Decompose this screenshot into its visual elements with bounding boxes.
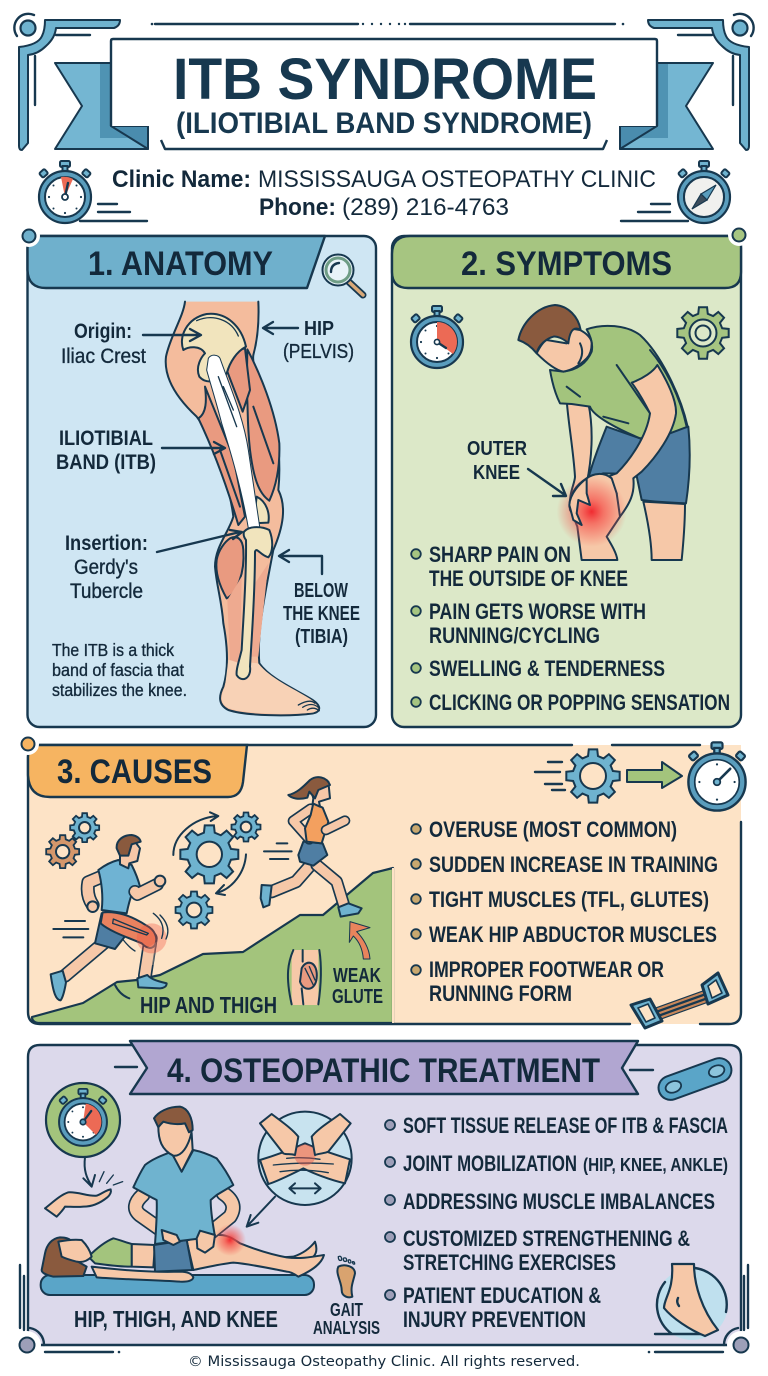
foot highlight: [222, 660, 318, 714]
rear arm: [293, 809, 311, 839]
itb label: BAND (ITB): [56, 451, 156, 474]
panel: symptoms: [392, 224, 750, 727]
therapist: upper body: [133, 1107, 233, 1253]
itb label: [56, 427, 156, 474]
therapist: neck: [170, 1133, 193, 1172]
symptom 1: THE OUTSIDE OF KNEE: [429, 566, 628, 591]
gait analysis label: [313, 1300, 380, 1338]
treatment 2: (HIP, KNEE, ANKLE): [583, 1155, 728, 1175]
leg contact line: [115, 985, 129, 998]
heading: 4. OSTEOPATHIC TREATMENT: [167, 1052, 600, 1090]
gear: large blue: [180, 825, 238, 883]
panel background: [28, 745, 741, 1024]
pelvis bone: [182, 314, 246, 381]
icon: magnifier: [322, 254, 363, 295]
back leg: [272, 865, 311, 892]
hill: [32, 868, 393, 1023]
corner ornament: top right: [648, 14, 754, 150]
pain glow: [557, 477, 627, 547]
hip label: [283, 318, 354, 363]
patient: near leg: [187, 1235, 324, 1277]
below the knee label: (TIBIA): [295, 626, 348, 648]
patient: head: [58, 1240, 92, 1262]
icon: foot and ankle: [655, 1264, 728, 1340]
symptom list: [411, 542, 730, 715]
near arm: [602, 365, 676, 517]
patient: shorts: [154, 1240, 192, 1272]
symptom 1: [411, 542, 628, 591]
outer knee label: [467, 438, 527, 484]
patient: torso skin: [132, 1244, 155, 1267]
gait analysis label: ANALYSIS: [313, 1318, 380, 1338]
hair and ponytail: [288, 777, 330, 799]
panel: causes: [17, 733, 746, 1028]
insertion label: [65, 532, 148, 603]
icon: gear with speed lines: [535, 749, 620, 803]
shorts: [588, 427, 690, 503]
speed lines left: [80, 204, 147, 221]
panel: anatomy: [18, 225, 376, 727]
therapist arm: right: [207, 1193, 233, 1235]
hand on knee: [569, 478, 590, 525]
patient: top: [88, 1238, 132, 1267]
heading ribbon: [130, 1041, 638, 1094]
title: ITB SYNDROME: [173, 47, 597, 112]
panel header: [28, 745, 247, 797]
treatment 5: INJURY PREVENTION: [403, 1307, 586, 1332]
muscle: calf: [216, 537, 244, 598]
torso: [98, 860, 140, 913]
muscle: hamstring: [198, 387, 245, 525]
icon: green arrow: [627, 762, 682, 788]
corner ornament: bottom right: [648, 1265, 755, 1359]
phone: Phone:: [259, 194, 336, 221]
shorts: [95, 913, 127, 949]
therapist hand: left: [162, 1230, 180, 1245]
panel background: [392, 236, 741, 727]
icon: stretch band: [655, 1055, 735, 1103]
copyright: © Mississauga Osteopathy Clinic. All rights reserved.: [188, 1354, 580, 1370]
cause 5: IMPROPER FOOTWEAR OR: [429, 957, 664, 982]
title box: [111, 39, 657, 149]
corner ornament: bottom left: [13, 1265, 120, 1359]
far leg: [643, 502, 685, 560]
glute illustration: [288, 950, 321, 1005]
treatment 4: CUSTOMIZED STRENGTHENING &: [403, 1226, 690, 1251]
below the knee label: [283, 580, 360, 648]
symptom 3: SWELLING & TENDERNESS: [429, 656, 665, 681]
origin label: [61, 320, 146, 368]
muscle: tensor fasciae latae: [227, 348, 250, 412]
panel frame: [28, 745, 741, 1024]
iliotibial band: [207, 355, 261, 534]
head: [537, 328, 592, 372]
hip label: (PELVIS): [283, 341, 354, 363]
cause 3: TIGHT MUSCLES (TFL, GLUTES): [429, 887, 709, 912]
front leg: [317, 865, 344, 906]
header: [14, 14, 754, 150]
hip label: HIP: [304, 318, 334, 340]
gait analysis label: GAIT: [330, 1300, 363, 1320]
icon: gear: [677, 307, 729, 359]
therapist hand: right: [197, 1231, 215, 1253]
arrow: itb: [162, 442, 225, 454]
weak glute label: GLUTE: [332, 986, 383, 1008]
knee pain glow: [214, 1224, 246, 1256]
hip and thigh label: HIP AND THIGH: [140, 992, 277, 1018]
symptom 1: SHARP PAIN ON: [429, 542, 571, 567]
hill ground edge: [392, 868, 394, 1023]
corner ornament: top left: [14, 14, 120, 150]
cause 5: [411, 957, 664, 1006]
arrow: below the knee: [279, 550, 322, 574]
corner dot: [728, 224, 750, 246]
toes: [298, 701, 319, 711]
hair: [518, 305, 581, 353]
symptom 2: PAIN GETS WORSE WITH: [429, 599, 646, 624]
origin label: Iliac Crest: [61, 345, 146, 368]
arrow: hip: [263, 322, 298, 334]
icon: compass watch: [678, 161, 730, 223]
clinic name: MISSISSAUGA OSTEOPATHY CLINIC: [258, 166, 656, 193]
leg anatomy illustration: [166, 302, 319, 715]
head: [309, 782, 330, 807]
cause 5: RUNNING FORM: [429, 981, 572, 1006]
treatment 5: PATIENT EDUCATION &: [403, 1283, 601, 1308]
arrow: inset to knee: [247, 1197, 275, 1227]
panel header: [28, 236, 325, 288]
speed lines: [264, 843, 292, 859]
front arm: [135, 884, 157, 894]
treatment list: [385, 1113, 728, 1332]
symptom 2: RUNNING/CYCLING: [429, 623, 600, 648]
top divider: [151, 23, 624, 25]
description: The ITB is a thick: [52, 640, 174, 660]
clinic name: Clinic Name:: [112, 166, 251, 193]
phone: (289) 216-4763: [342, 194, 509, 221]
tibia and fibula: [237, 527, 272, 679]
magnified tissue inset: [258, 1112, 352, 1205]
therapist: shirt: [133, 1150, 233, 1244]
symptom 2: [411, 599, 646, 648]
tank top: [305, 803, 328, 843]
ribbon: left: [55, 63, 148, 149]
runner: man: [51, 835, 168, 1000]
outer knee label: KNEE: [473, 462, 520, 484]
footprint: [337, 1256, 355, 1297]
treatment 4: STRETCHING EXERCISES: [403, 1250, 616, 1275]
strain marks: [123, 913, 168, 951]
knee: [569, 474, 620, 560]
head: [120, 842, 140, 868]
femur end and patella: [253, 497, 269, 523]
muscle: quadriceps: [247, 349, 279, 501]
hair: [117, 835, 141, 856]
insertion label: Tubercle: [70, 580, 143, 603]
panel background: [28, 236, 376, 727]
patient: far leg: [227, 1242, 316, 1263]
patient: arm: [92, 1267, 193, 1282]
outer knee label: OUTER: [467, 438, 527, 460]
front lower leg: [145, 938, 151, 976]
treatment 2: [385, 1151, 728, 1176]
speed lines: [53, 921, 88, 937]
subtitle: (ILIOTIBIAL BAND SYNDROME): [176, 107, 592, 140]
thigh with inflamed itb: [101, 912, 156, 948]
treatment mat: [41, 1275, 314, 1295]
therapist: head: [158, 1120, 192, 1156]
therapist: hair: [154, 1107, 193, 1132]
arrow: insertion: [157, 530, 242, 552]
back leg: [65, 943, 103, 976]
open hand: [45, 1189, 111, 1217]
icon: resistance band: [631, 973, 728, 1028]
clinic details: [39, 161, 730, 223]
insertion label: Insertion:: [65, 532, 148, 555]
arrow: stopwatch to hand: [83, 1157, 95, 1187]
heading: 2. SYMPTOMS: [461, 245, 672, 283]
t-shirt: [550, 326, 688, 438]
gear: small blue right: [232, 813, 260, 841]
hip thigh knee label: HIP, THIGH, AND KNEE: [74, 1306, 278, 1332]
therapist arm: left: [136, 1195, 168, 1235]
causes list: [411, 817, 718, 1006]
illustration: treatment scene: [41, 1107, 355, 1297]
arrow: origin: [143, 329, 201, 341]
arrow: outer knee: [528, 469, 566, 496]
panel background: [28, 1045, 741, 1345]
weak glute label: [332, 965, 383, 1008]
heading: 3. CAUSES: [57, 753, 212, 791]
rotation arrows: [173, 812, 246, 895]
below the knee label: BELOW: [294, 580, 348, 602]
icon: stopwatch: [39, 161, 91, 223]
gear: blue top left: [70, 813, 99, 842]
gear: medium blue bottom: [176, 892, 212, 928]
weak glute label: WEAK: [333, 965, 381, 987]
runner: woman: [261, 777, 362, 917]
insertion label: Gerdy's: [74, 556, 138, 579]
itb label: ILIOTIBIAL: [59, 427, 153, 450]
treatment 4: [385, 1226, 690, 1275]
back arm: [88, 877, 102, 905]
gear: tan: [46, 835, 79, 868]
speed lines right: [621, 204, 688, 221]
patient: hair: [42, 1237, 87, 1277]
arrow: weak glute: [349, 922, 370, 959]
treatment 5: [385, 1283, 601, 1332]
shorts: [298, 842, 327, 866]
panel: osteopathic treatment: [28, 1041, 741, 1345]
corner dot: [17, 733, 39, 755]
ribbon side lines: [115, 1067, 653, 1070]
description: stabilizes the knee.: [52, 680, 187, 700]
pain marks: [99, 1172, 123, 1185]
below the knee label: THE KNEE: [283, 603, 360, 625]
front arm: [326, 821, 345, 830]
icon: stopwatch on green circle: [46, 1083, 120, 1157]
origin label: Origin:: [74, 320, 132, 343]
leg outline: [166, 302, 319, 715]
ribbon: right: [620, 63, 713, 149]
illustration: gears and runners: [46, 777, 370, 1005]
cause 1: OVERUSE (MOST COMMON): [429, 817, 677, 842]
heading: 1. ANATOMY: [88, 245, 273, 283]
corner dot: [18, 225, 40, 247]
figure: man holding knee: [518, 305, 690, 560]
panel header: [392, 236, 741, 288]
icon: stopwatch: [411, 306, 463, 368]
icon: stopwatch: [688, 742, 746, 811]
description: band of fascia that: [52, 660, 184, 680]
bent arm behind: [567, 400, 592, 527]
description: [52, 640, 187, 700]
treatment 2: JOINT MOBILIZATION: [403, 1151, 577, 1176]
